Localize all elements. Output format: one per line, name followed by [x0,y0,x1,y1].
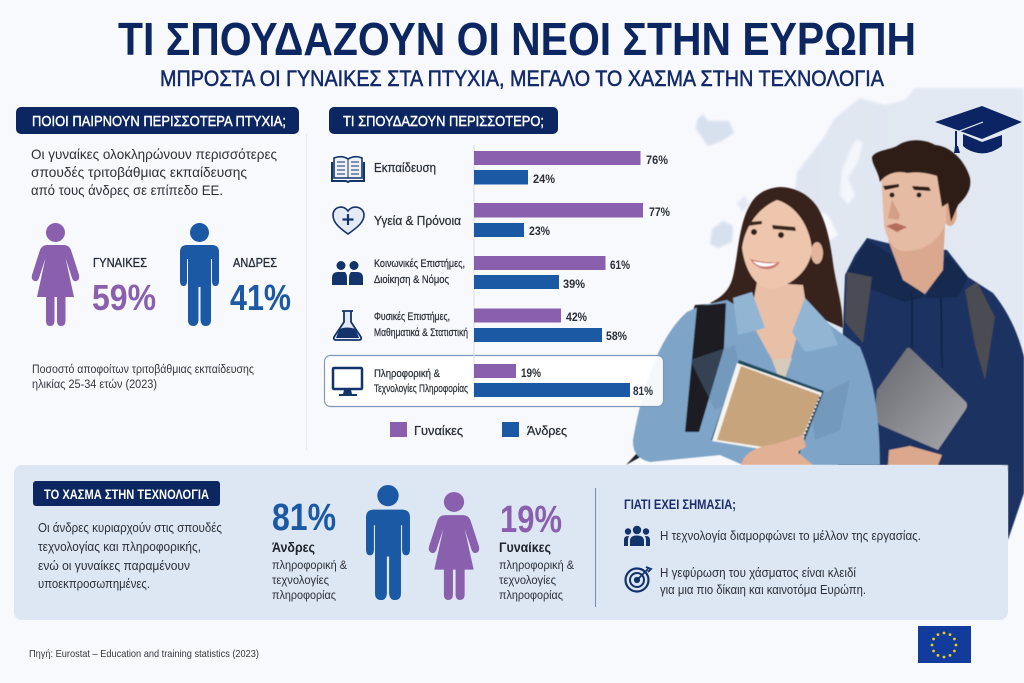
bars: natural sciences: 58% [606,329,627,343]
note: ηλικίας 25-34 ετών (2023) [32,379,157,391]
intro text: Οι γυναίκες ολοκληρώνουν περισσότερες [31,146,277,162]
description: ενώ οι γυναίκες παραμένουν [38,558,190,573]
icon: group [624,526,650,546]
bar chart [474,151,670,398]
heading pill [33,481,220,506]
panel: who gets more degrees [16,107,299,391]
laptop [875,348,967,450]
heading pill: ΠΟΙΟΙ ΠΑΙΡΝΟΥΝ ΠΕΡΙΣΣΟΤΕΡΑ ΠΤΥΧΙΑ; [32,113,286,130]
icon: man [180,223,219,326]
face [742,200,812,289]
stat: men 81% [272,497,347,602]
ear [943,200,957,226]
description: Οι άνδρες κυριαρχούν στις σπουδές [38,520,222,535]
stat: women 19%: πληροφορική & [499,558,574,572]
icon: woman [32,223,79,326]
stat: women 19%: πληροφορίας [499,588,563,602]
description: υποεκπροσωπημένες. [38,576,150,591]
category labels: Υγεία & Πρόνοια [374,214,461,228]
bars: natural sciences [474,308,627,343]
stat: women 19%: τεχνολογίες [499,573,556,587]
heading pill [16,107,299,134]
description [38,520,222,591]
bars: natural sciences: 42% [566,310,587,324]
category labels [374,161,468,395]
point 2 [660,565,866,597]
hand on laptop [888,446,942,465]
hoodie [838,238,1024,540]
bars: social sciences: 61% [610,258,630,272]
photo: male student with hoodie and laptop [838,140,1024,540]
intro text [31,146,277,198]
stat: women 59% [92,255,156,318]
icon: monitor [333,368,362,396]
ear [811,242,823,264]
bars: education [474,151,668,186]
stat: men 41% [230,255,291,318]
category labels: Μαθηματικά & Στατιστική [374,327,468,339]
collar [733,292,838,352]
icon: EU flag [918,626,971,663]
bars: education: 24% [533,172,555,186]
bars: social sciences [474,256,630,291]
photo: female student with denim jacket and notebook [626,187,880,465]
icon: woman [429,492,479,600]
stat: men 41%: 41% [230,277,291,318]
description: τεχνολογίας και πληροφορικής, [38,539,201,554]
panel: what they study most [324,107,670,438]
category labels: Διοίκηση & Νόμος [374,274,449,286]
intro text: σπουδές τριτοβάθμιας εκπαίδευσης [31,164,247,180]
bars: ICT: 19% [521,366,541,380]
jacket [633,298,880,465]
stat: women 19%: Γυναίκες [499,539,551,555]
stat: women 19% [499,499,574,602]
hand on notebook [741,435,813,465]
legend: Γυναίκες [414,423,463,438]
point 1: Η τεχνολογία διαμορφώνει το μέλλον της εργασίας. [660,528,921,543]
stat: men 81%: 81% [272,497,336,539]
stat: men 81%: Άνδρες [272,539,315,555]
note: Ποσοστό αποφοίτων τριτοβάθμιας εκπαίδευσης [32,364,254,376]
title: ΤΙ ΣΠΟΥΔΑΖΟΥΝ ΟΙ ΝΕΟΙ ΣΤΗΝ ΕΥΡΩΠΗ [118,13,916,65]
panel: the technology gap [14,465,1008,620]
icon: heart with cross [333,207,364,234]
hair [872,140,970,222]
heading pill: ΤΙ ΣΠΟΥΔΑΖΟΥΝ ΠΕΡΙΣΣΟΤΕΡΟ; [343,113,544,130]
icon: target [626,567,651,592]
why it matters [624,497,921,597]
bars: ICT [474,364,653,398]
stat: women 19%: 19% [500,499,562,541]
note [32,364,254,391]
hair back [710,187,843,328]
icon: graduation cap [935,106,1022,153]
point 2: Η γεφύρωση του χάσματος είναι κλειδί [660,565,856,580]
bars: health: 77% [649,205,670,219]
bars: ICT: 81% [633,384,653,398]
background map of Europe [696,88,1024,470]
heading pill: ΤΟ ΧΑΣΜΑ ΣΤΗΝ ΤΕΧΝΟΛΟΓΙΑ [44,486,209,502]
backpack [626,303,727,465]
intro text: από τους άνδρες σε επίπεδο ΕΕ. [31,182,223,198]
neck [888,225,945,294]
category labels: Φυσικές Επιστήμες, [374,311,450,323]
source: Πηγή: Eurostat – Education and training statistics (2023) [29,648,259,660]
stat: women 59%: 59% [92,277,156,318]
category labels: Πληροφορική & [374,368,441,380]
stat: women 59%: ΓΥΝΑΙΚΕΣ [93,255,147,270]
stat: men 81%: τεχνολογίες [272,573,329,587]
icon: people [332,261,363,285]
neck [750,282,806,368]
highlight box: ICT [324,356,664,406]
stat: men 81%: πληροφορίας [272,588,336,602]
bars: health: 23% [529,224,550,238]
icon: man [366,485,410,600]
subtitle: ΜΠΡΟΣΤΑ ΟΙ ΓΥΝΑΙΚΕΣ ΣΤΑ ΠΤΥΧΙΑ, ΜΕΓΑΛΟ ΤΟ ΧΑΣΜΑ ΣΤΗΝ ΤΕΧΝΟΛΟΓΙΑ [160,66,884,91]
bars: social sciences: 39% [563,277,585,291]
category labels: Τεχνολογίες Πληροφορίας [374,383,468,395]
icon: flask [334,311,361,340]
category labels: Κοινωνικές Επιστήμες, [374,258,465,270]
legend [390,422,567,438]
stat: men 81%: πληροφορική & [272,558,347,572]
heading: ΓΙΑΤΙ ΕΧΕΙ ΣΗΜΑΣΙΑ; [624,497,736,512]
legend: Άνδρες [527,423,567,438]
heading pill [329,107,558,134]
point 2: για μια πιο δίκαιη και καινοτόμα Ευρώπη. [660,582,866,597]
bars: health [474,203,670,238]
icon: book [332,157,364,182]
bars: education: 76% [646,153,668,167]
category labels: Εκπαίδευση [374,161,436,175]
face [881,170,946,251]
notebook [711,360,824,455]
stat: men 41%: ΑΝΔΡΕΣ [233,255,277,270]
backpack straps [845,272,995,380]
